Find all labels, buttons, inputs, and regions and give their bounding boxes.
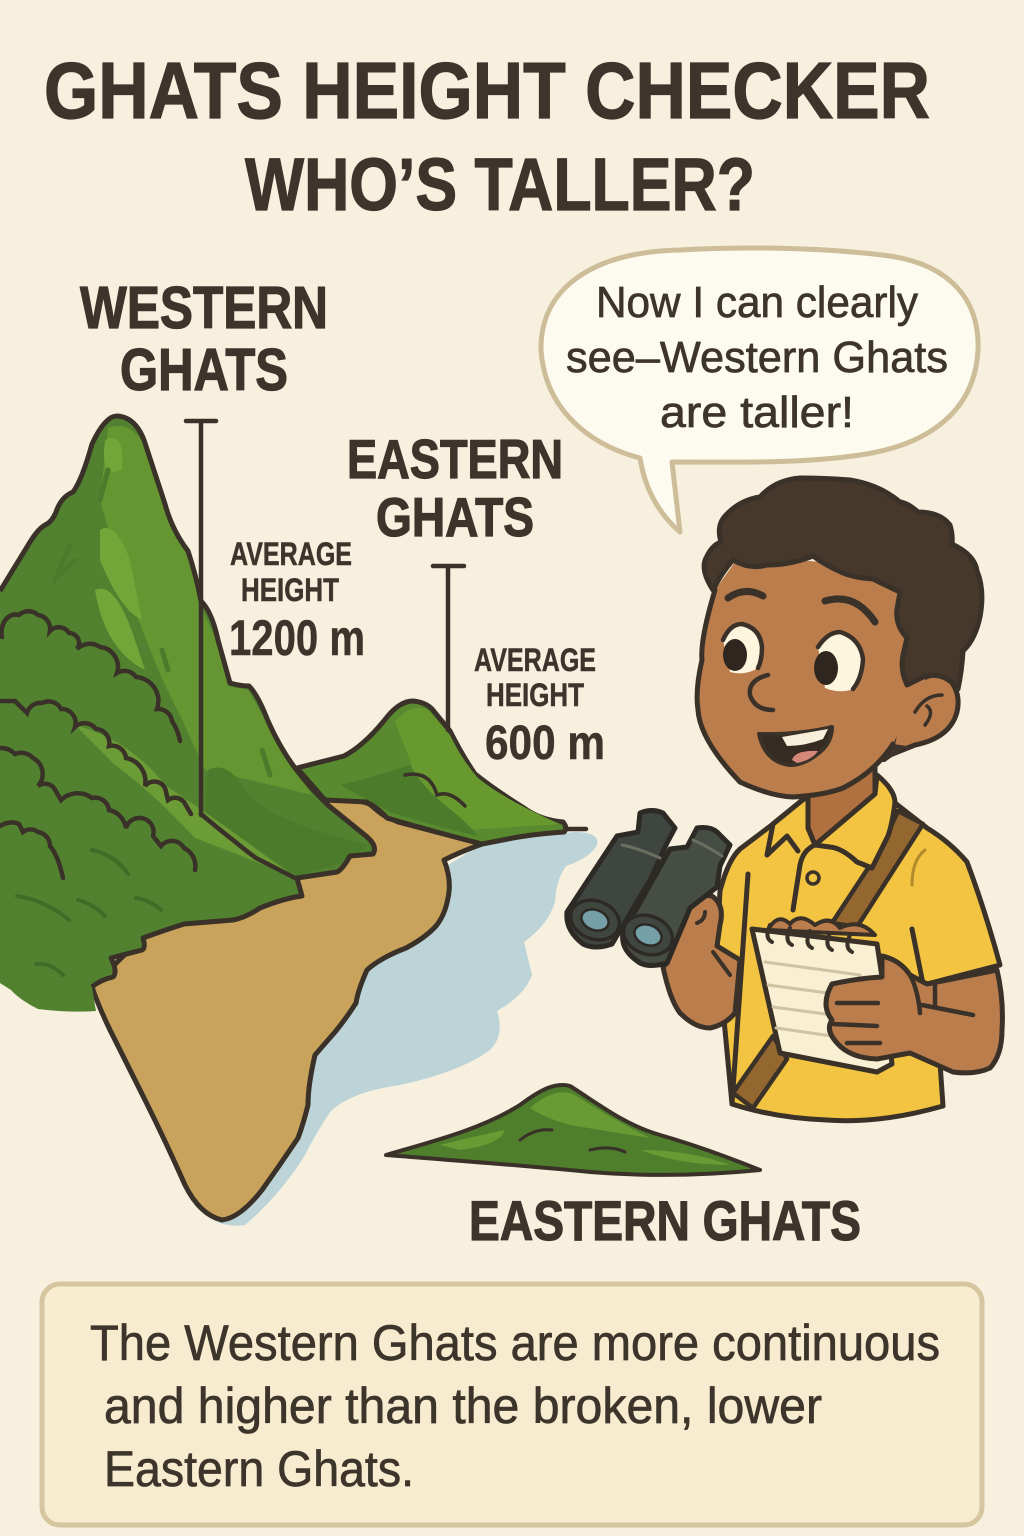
western height text: AVERAGE — [230, 536, 352, 572]
fact panel: Eastern Ghats. — [104, 1441, 414, 1497]
land: peninsula — [92, 798, 482, 1220]
eyes — [723, 624, 762, 673]
western ghats label: WESTERN — [80, 275, 328, 341]
title — [44, 46, 930, 226]
eastern ghats bottom label: EASTERN GHATS — [469, 1189, 861, 1252]
fact panel — [42, 1284, 982, 1525]
eastern height text — [474, 642, 605, 770]
eastern ghats label: GHATS — [376, 486, 534, 548]
speech bubble: are taller! — [660, 388, 854, 437]
lit front ridge — [75, 725, 296, 878]
hair — [704, 478, 982, 689]
collar — [815, 775, 895, 868]
child with binoculars and notepad — [565, 478, 1002, 1121]
shaded lower slope — [205, 768, 368, 876]
back-of-neck hair — [870, 744, 907, 762]
notepad coil — [767, 925, 852, 952]
small eastern ghats hill — [386, 1085, 760, 1175]
sunlit upper slope — [100, 426, 312, 795]
eastern height text: HEIGHT — [486, 677, 584, 713]
fact panel: The Western Ghats are more continuous — [90, 1315, 940, 1371]
nose — [750, 675, 773, 710]
ridge scallop lines — [2, 611, 180, 741]
eyebrows — [728, 591, 875, 622]
mouth — [759, 727, 832, 765]
western height text: HEIGHT — [241, 572, 339, 608]
western height marker — [186, 421, 216, 815]
mountain outline — [0, 416, 374, 987]
ear — [890, 675, 958, 755]
fingers behind notepad — [768, 918, 875, 935]
western ghats mountain — [0, 416, 374, 1012]
western height text: 1200 m — [229, 610, 365, 666]
button — [807, 872, 819, 884]
head — [697, 555, 925, 797]
speech bubble — [541, 248, 978, 532]
neck — [808, 765, 875, 845]
binoculars — [565, 810, 730, 966]
western ghats label — [80, 275, 328, 403]
speech bubble: Now I can clearly — [596, 278, 918, 327]
eastern ghats mountain — [297, 701, 566, 844]
speech bubble: see–Western Ghats — [566, 333, 948, 382]
title: WHO’S TALLER? — [245, 143, 755, 226]
shirt — [717, 779, 1000, 1121]
sea — [210, 832, 597, 1226]
front arm and hand — [826, 956, 1002, 1073]
fact panel: and higher than the broken, lower — [104, 1378, 822, 1434]
eastern ghats label: EASTERN — [347, 428, 563, 490]
eastern height marker — [433, 566, 586, 829]
eastern ghats label — [347, 428, 563, 548]
western height text — [229, 536, 365, 666]
eastern height text: 600 m — [485, 717, 605, 770]
strap — [832, 811, 923, 927]
notepad — [752, 929, 892, 1072]
back hand — [663, 896, 740, 1028]
western ghats label: GHATS — [120, 337, 288, 403]
eastern height text: AVERAGE — [474, 642, 596, 678]
